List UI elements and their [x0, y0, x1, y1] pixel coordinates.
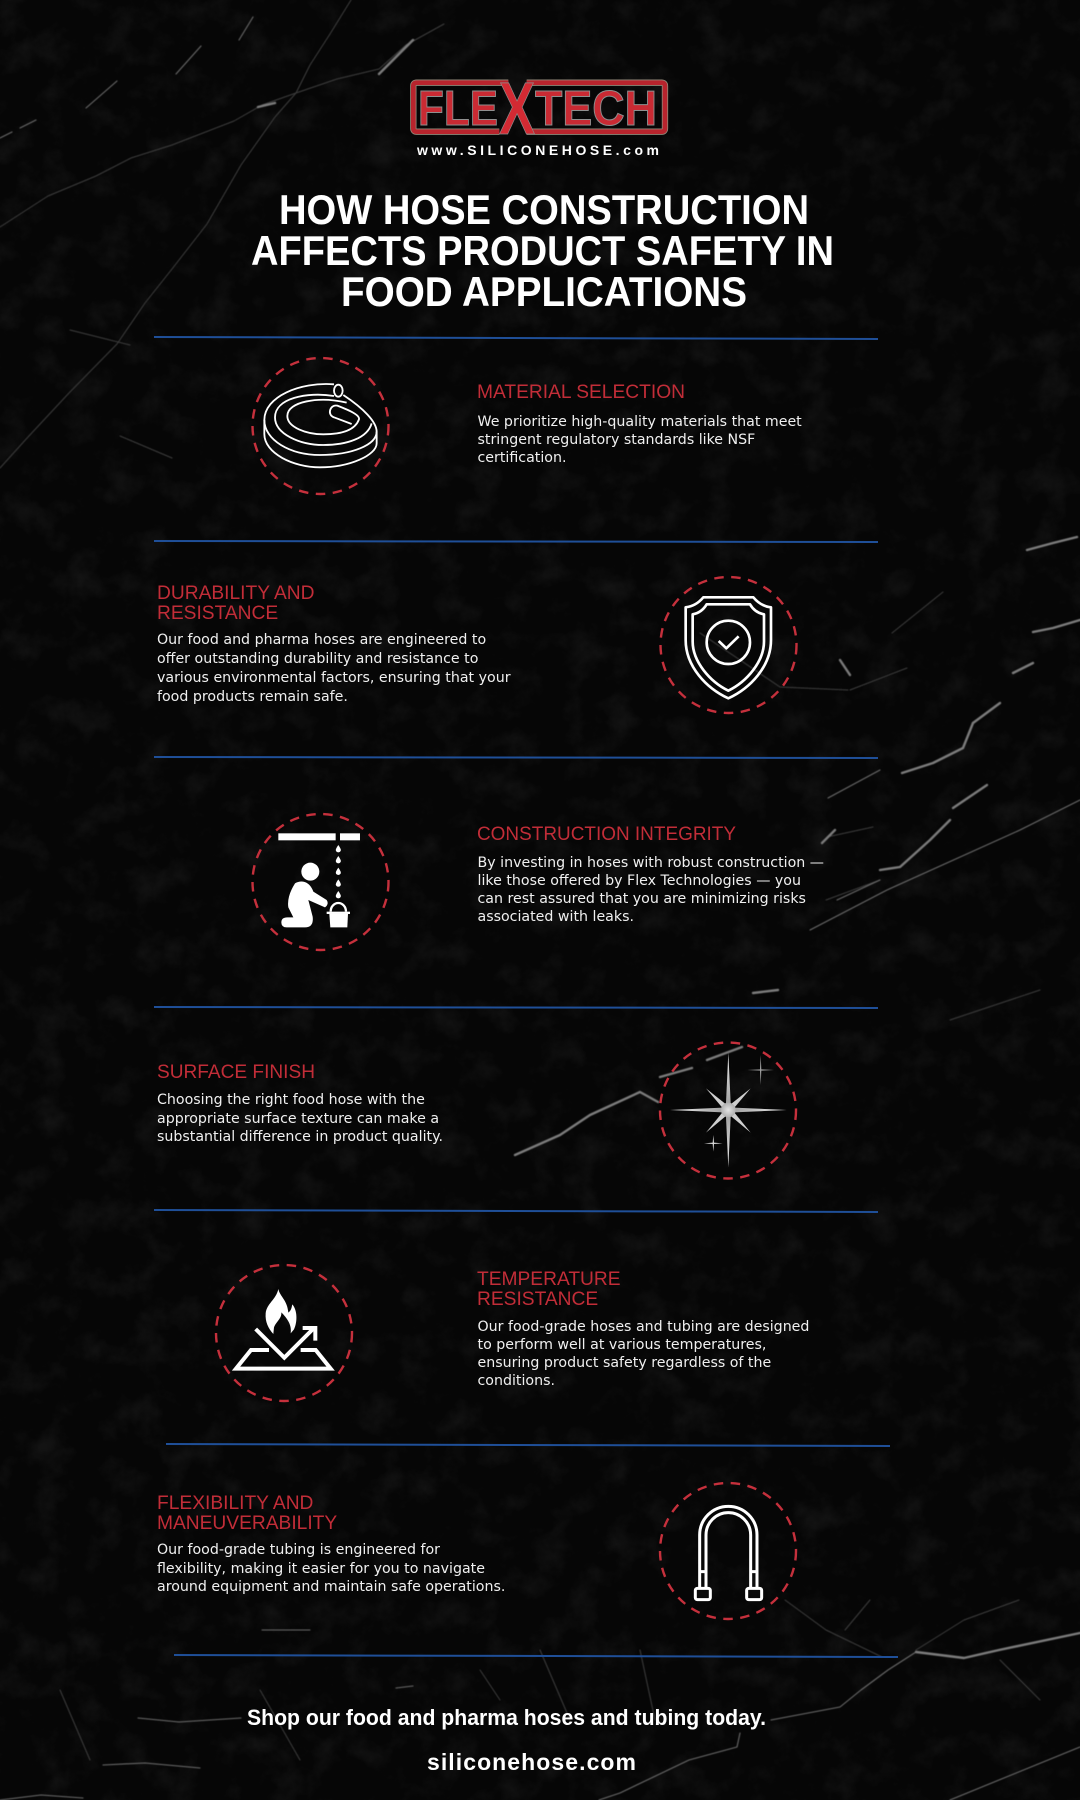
call to action: Shop our food and pharma hoses and tubing today. [247, 1705, 766, 1730]
text block: Our food and pharma hoses are engineered to [157, 632, 486, 648]
heading [157, 1493, 337, 1534]
logo wordmark start: FLE [418, 82, 498, 136]
icon: flame and rising arrow [216, 1265, 352, 1401]
heading: SURFACE FINISH [157, 1062, 315, 1083]
logo X: X [499, 67, 535, 150]
text block: associated with leaks. [478, 909, 634, 925]
title: HOW HOSE CONSTRUCTION [279, 186, 809, 233]
logo frame [413, 83, 665, 132]
heading: TEMPERATURE [477, 1269, 621, 1290]
heading: MATERIAL SELECTION [477, 382, 685, 403]
heading [157, 583, 314, 624]
panel: durability and resistance [157, 577, 796, 713]
text block: around equipment and maintain safe operations. [157, 1579, 505, 1595]
panel: material selection [252, 358, 802, 494]
heading: RESISTANCE [477, 1289, 598, 1310]
title: FOOD APPLICATIONS [341, 268, 747, 315]
text block: various environmental factors, ensuring that your [157, 670, 511, 686]
panel: construction integrity [252, 814, 824, 950]
heading [477, 1269, 621, 1310]
text block: flexibility, making it easier for you to navigate [157, 1561, 485, 1577]
text block: certification. [478, 450, 566, 466]
text block: We prioritize high-quality materials that meet [478, 414, 802, 430]
logo [413, 67, 665, 158]
icon: sparkle [660, 1042, 796, 1178]
text block: stringent regulatory standards like NSF [478, 432, 755, 448]
text block: substantial difference in product quality. [157, 1129, 443, 1145]
text block: offer outstanding durability and resistance to [157, 651, 478, 667]
title [251, 186, 834, 315]
text block: like those offered by Flex Technologies — you [478, 873, 801, 889]
logo url: www.SILICONEHOSE.com [416, 142, 659, 158]
heading: CONSTRUCTION INTEGRITY [477, 824, 736, 845]
text block: Our food-grade hoses and tubing are designed [478, 1319, 809, 1335]
text block: to perform well at various temperatures, [478, 1337, 766, 1353]
title: AFFECTS PRODUCT SAFETY IN [251, 227, 834, 274]
text block: Choosing the right food hose with the [157, 1092, 425, 1108]
panel: surface finish [157, 1042, 796, 1178]
text block: appropriate surface texture can make a [157, 1111, 439, 1127]
text block [478, 414, 802, 466]
icon: coiled hose [252, 358, 388, 494]
text block: conditions. [478, 1373, 555, 1389]
text block: ensuring product safety regardless of the [478, 1355, 771, 1371]
panel: temperature resistance [216, 1265, 809, 1401]
heading: FLEXIBILITY AND [157, 1493, 313, 1514]
icon: leak and bucket [252, 814, 388, 950]
icon: U-shaped hose [660, 1483, 796, 1619]
panel: flexibility and maneuverability [157, 1483, 796, 1619]
text block: By investing in hoses with robust construction — [478, 855, 824, 871]
heading: RESISTANCE [157, 603, 278, 624]
heading: DURABILITY AND [157, 583, 314, 604]
text block [157, 1092, 443, 1145]
text block [478, 1319, 809, 1389]
icon: shield with check [660, 577, 796, 713]
text block [157, 632, 511, 705]
heading: MANEUVERABILITY [157, 1513, 337, 1534]
text block: can rest assured that you are minimizing risks [478, 891, 806, 907]
text block: Our food-grade tubing is engineered for [157, 1542, 440, 1558]
text block [478, 855, 824, 925]
text block [157, 1542, 505, 1595]
logo wordmark end: TECH [535, 82, 657, 136]
website link: siliconehose.com [427, 1749, 636, 1775]
text block: food products remain safe. [157, 689, 348, 705]
